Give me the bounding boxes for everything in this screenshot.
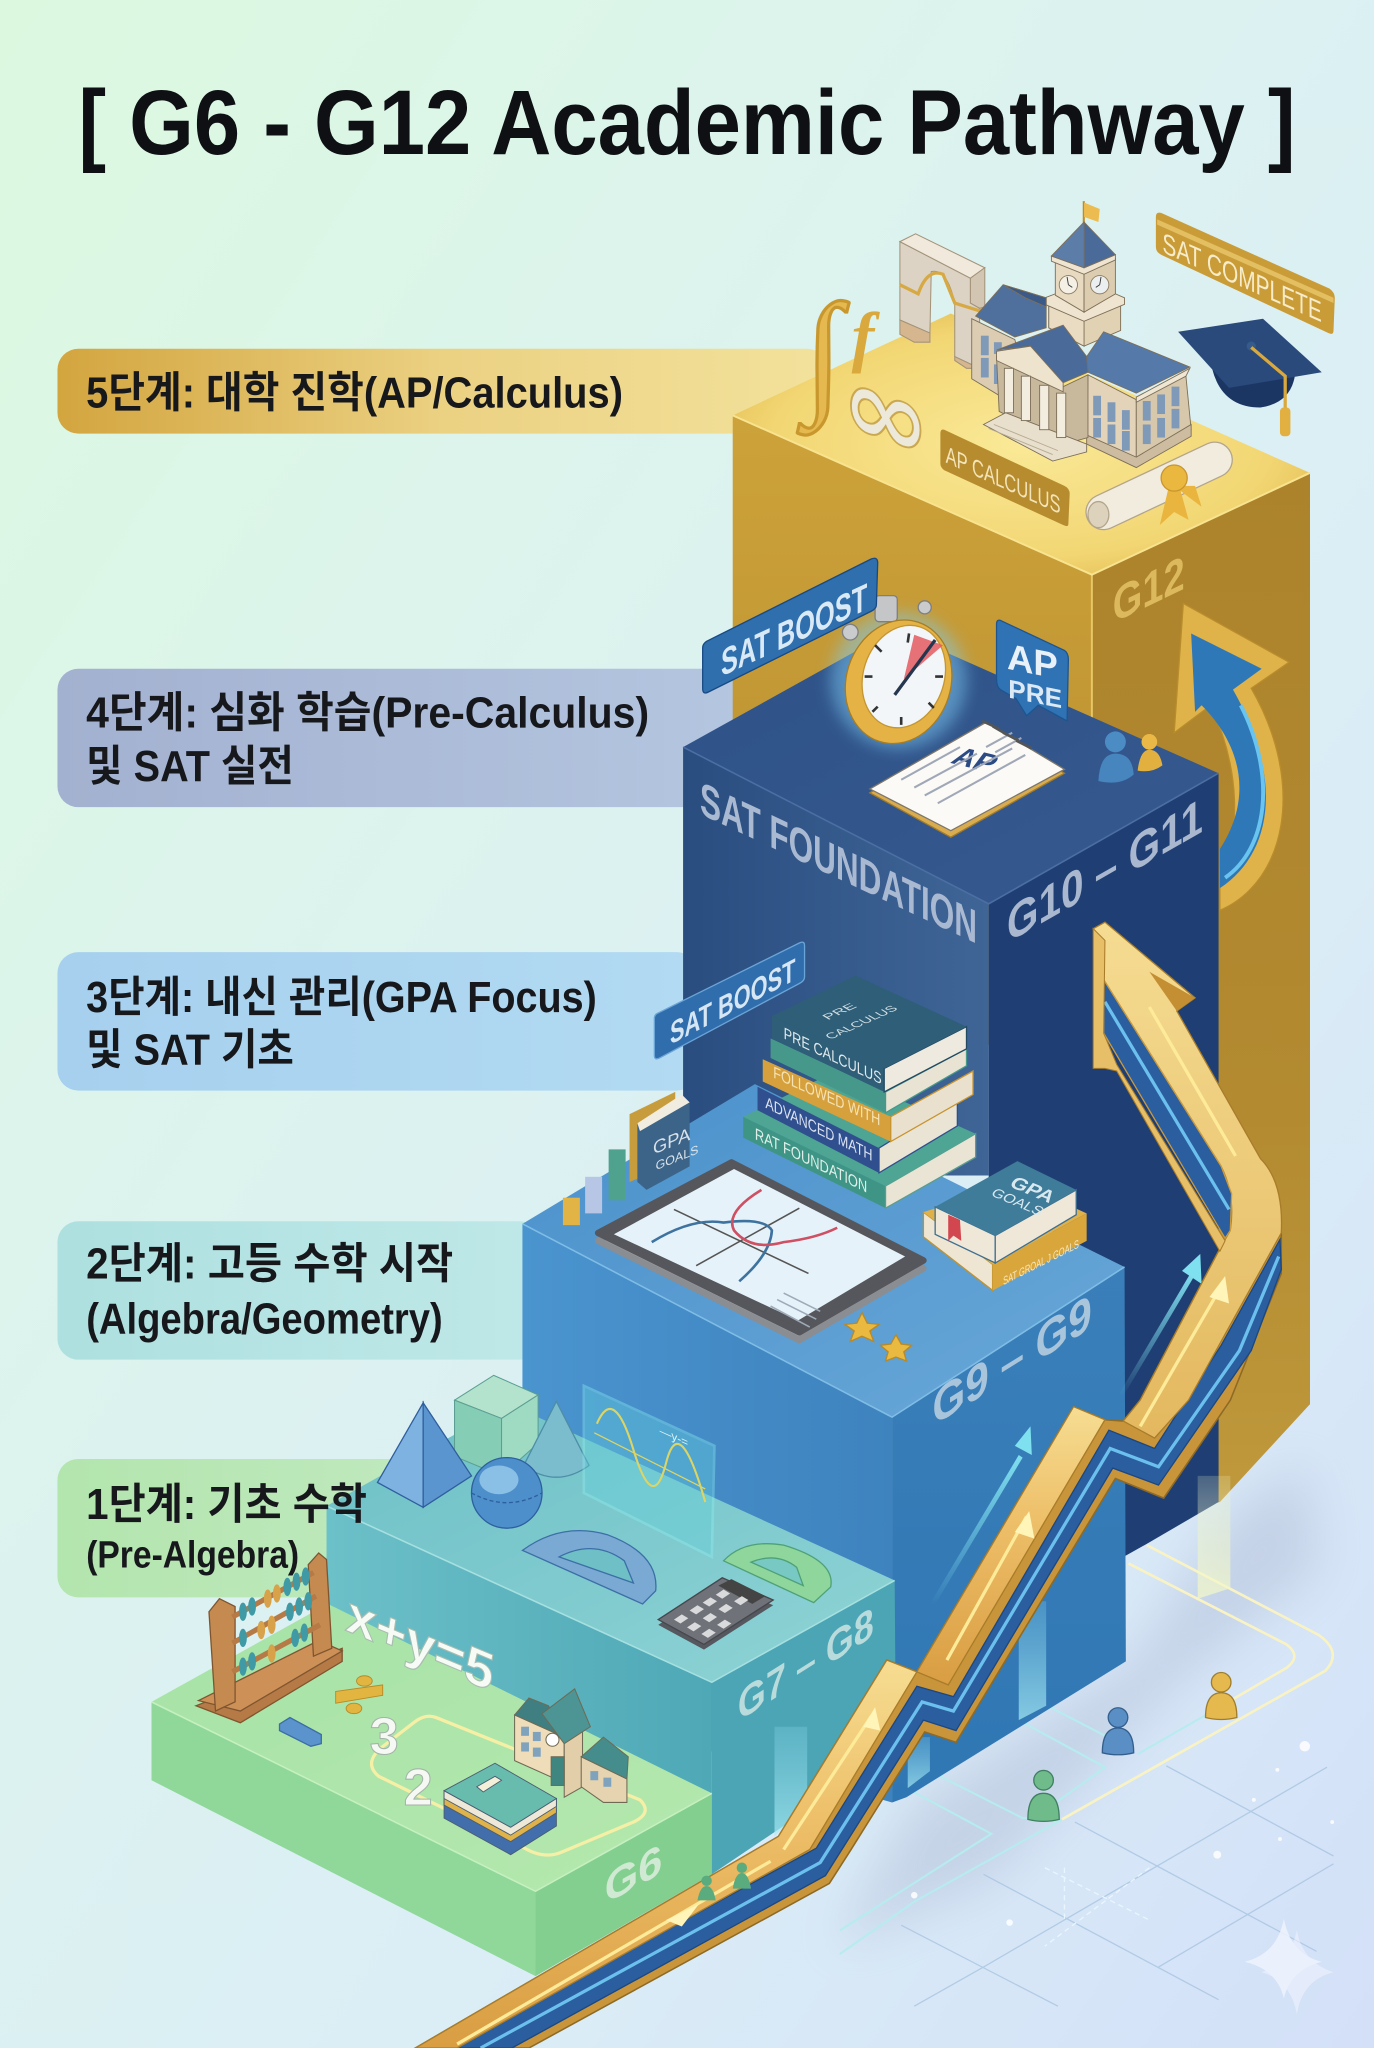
label text: stage 5: 5단계: 대학 진학(AP/Calculus) xyxy=(86,370,623,418)
label text: stage 1 xyxy=(86,1481,367,1576)
protractor blue xyxy=(522,1531,656,1604)
stopwatch xyxy=(830,596,968,758)
GPA book pair: GPA xyxy=(1005,1174,1059,1207)
ribbon blue band xyxy=(451,1240,1281,2048)
arrow left wing xyxy=(1093,929,1225,1251)
people on path xyxy=(697,1672,1237,1900)
G10-G11 objects xyxy=(703,558,1162,837)
side text: SAT FOUNDATION: SAT FOUNDATION xyxy=(700,772,977,954)
tablet with graph xyxy=(598,1162,923,1340)
label bar: stage 3 xyxy=(57,952,697,1091)
hologram screen xyxy=(584,1386,714,1557)
floor shadow, glowing paths and grid xyxy=(836,1463,1334,2006)
badge: AP CALCULUS: AP CALCULUS xyxy=(946,441,1061,520)
ribbon gold segment A xyxy=(415,1660,917,2048)
grade label: G10 - G11: G10 – G11 xyxy=(1007,788,1203,954)
label text: stage 2 xyxy=(86,1241,453,1344)
book stack: FOLLOWED WITH xyxy=(773,1062,880,1130)
label text: stage 4: 4단계: 심화 학습(Pre-Calculus) xyxy=(86,690,649,738)
portico roof xyxy=(997,325,1088,383)
stars xyxy=(845,1313,912,1361)
small books xyxy=(444,1763,556,1855)
stage labels text xyxy=(86,370,649,1576)
label text: stage 2: 2단계: 고등 수학 시작 xyxy=(86,1241,453,1289)
curved up arrow xyxy=(1174,603,1289,910)
block: G7-G8 teal xyxy=(327,1404,896,1874)
right wing walls xyxy=(1087,375,1136,464)
standing GPA book: GOALS xyxy=(656,1142,698,1173)
pyramid xyxy=(377,1403,471,1507)
book stack: ADVANCED MATH xyxy=(765,1093,872,1165)
badge: AP PRE xyxy=(997,620,1068,721)
book stack xyxy=(743,976,976,1208)
abacus xyxy=(196,1553,342,1723)
label text: stage 3 xyxy=(86,974,597,1074)
label text: stage 1: (Pre-Algebra) xyxy=(86,1534,299,1576)
arch xyxy=(900,234,993,368)
calculator xyxy=(658,1578,773,1650)
sphere xyxy=(471,1458,542,1528)
person: yellow xyxy=(1206,1672,1237,1720)
standing GPA book: GPA xyxy=(653,1124,691,1159)
graduation cap xyxy=(1178,319,1322,436)
block: G6 green xyxy=(152,1604,712,1976)
label text: stage 3: 및 SAT 기초 xyxy=(86,1026,294,1074)
G6 objects xyxy=(196,1553,628,1855)
grade label: G12: G12 xyxy=(1113,545,1185,633)
G7-G8 objects xyxy=(377,1375,831,1650)
label text: stage 1: 1단계: 기초 수학 xyxy=(86,1481,367,1529)
equation x+y=5: x+y=5 xyxy=(343,1585,498,1703)
hologram screen: —y-= xyxy=(660,1424,688,1450)
rising path arrow xyxy=(415,922,1282,2048)
glowing track xyxy=(372,1716,645,1855)
label bar: stage 2 xyxy=(57,1221,541,1360)
windows xyxy=(1093,387,1179,451)
ribbon gold segment C and shaft xyxy=(1093,922,1282,1438)
stage label backgrounds xyxy=(57,349,828,1597)
infinity symbol: ∞ xyxy=(841,335,930,492)
book stack: PRE xyxy=(819,1001,860,1021)
badge: SAT BOOST small: SAT BOOST xyxy=(670,952,796,1052)
book stack: PRE CALCULUS xyxy=(784,1023,882,1088)
protractor green xyxy=(724,1544,831,1603)
label bar: stage 4 xyxy=(57,669,750,807)
diploma xyxy=(1088,460,1215,528)
label text: stage 2: (Algebra/Geometry) xyxy=(86,1296,443,1344)
badge: SAT COMPLETE xyxy=(1156,213,1335,334)
label text: stage 4: 및 SAT 실전 xyxy=(86,743,294,791)
school xyxy=(515,1689,628,1802)
person: blue xyxy=(1102,1708,1134,1755)
person: green xyxy=(1028,1770,1059,1821)
book stack: RAT FOUNDATION xyxy=(755,1124,867,1197)
right roof xyxy=(1087,332,1190,393)
grade label: G6: G6 xyxy=(605,1834,662,1914)
ribbon gold segment B xyxy=(917,1407,1105,1685)
f symbol: f xyxy=(852,298,881,374)
GPA book pair: GOALS xyxy=(988,1186,1047,1219)
badge: SAT BOOST small xyxy=(654,942,805,1059)
cone xyxy=(524,1401,589,1477)
plus-minus block xyxy=(336,1676,383,1714)
notepad: AP xyxy=(945,743,1004,778)
notepad xyxy=(870,721,1064,837)
standing GPA book xyxy=(630,1092,698,1190)
number 3: 3 xyxy=(370,1708,399,1766)
shaft blue strip xyxy=(1104,980,1232,1238)
label bar: stage 5 xyxy=(57,349,828,434)
G9 objects xyxy=(563,942,1087,1361)
minus bar xyxy=(280,1718,321,1746)
badge: AP PRE: PRE xyxy=(1008,674,1062,714)
university building xyxy=(972,201,1191,468)
G12 objects xyxy=(797,201,1335,528)
GPA book pair: SAT GROAL J GOALS xyxy=(1003,1237,1079,1288)
cube xyxy=(455,1375,538,1476)
integral symbol: ∫ xyxy=(797,276,850,435)
steps xyxy=(983,413,1087,461)
ribbon light line xyxy=(481,1256,1279,2048)
grade label: G9 - G9: G9 – G9 xyxy=(933,1284,1092,1437)
highlights xyxy=(457,1007,1236,2044)
number 2: 2 xyxy=(404,1759,433,1817)
badge: AP CALCULUS xyxy=(940,429,1070,526)
mini bar chart xyxy=(563,1149,626,1225)
left wing xyxy=(972,319,1032,405)
columns xyxy=(1004,368,1066,438)
block: G10-G11 navy xyxy=(683,630,1219,1633)
label bar: stage 1 xyxy=(57,1459,410,1597)
flag xyxy=(1083,201,1085,225)
block: G9 blue xyxy=(522,1084,1126,1802)
sparkle logo xyxy=(1245,1919,1334,2014)
light arrows on blocks xyxy=(930,1254,1202,1607)
portico wall xyxy=(997,357,1088,444)
grade label: G7 - G8: G7 – G8 xyxy=(738,1597,874,1731)
book stack: CALCULUS xyxy=(821,1003,901,1041)
label text: stage 4 xyxy=(86,690,649,791)
block: G12 gold xyxy=(733,313,1310,1535)
badge: SAT BOOST large: SAT BOOST xyxy=(721,576,867,685)
badge: AP PRE: AP xyxy=(1007,636,1058,687)
label text: stage 3: 3단계: 내신 관리(GPA Focus) xyxy=(86,974,597,1022)
GPA book pair xyxy=(923,1161,1087,1290)
tower xyxy=(1049,302,1121,346)
badge: SAT BOOST large xyxy=(703,558,878,693)
people icons xyxy=(1098,731,1162,783)
glow columns xyxy=(775,1476,1230,1836)
ribbon base edge xyxy=(415,1233,1281,2048)
arrow wing underside xyxy=(1149,972,1195,1011)
